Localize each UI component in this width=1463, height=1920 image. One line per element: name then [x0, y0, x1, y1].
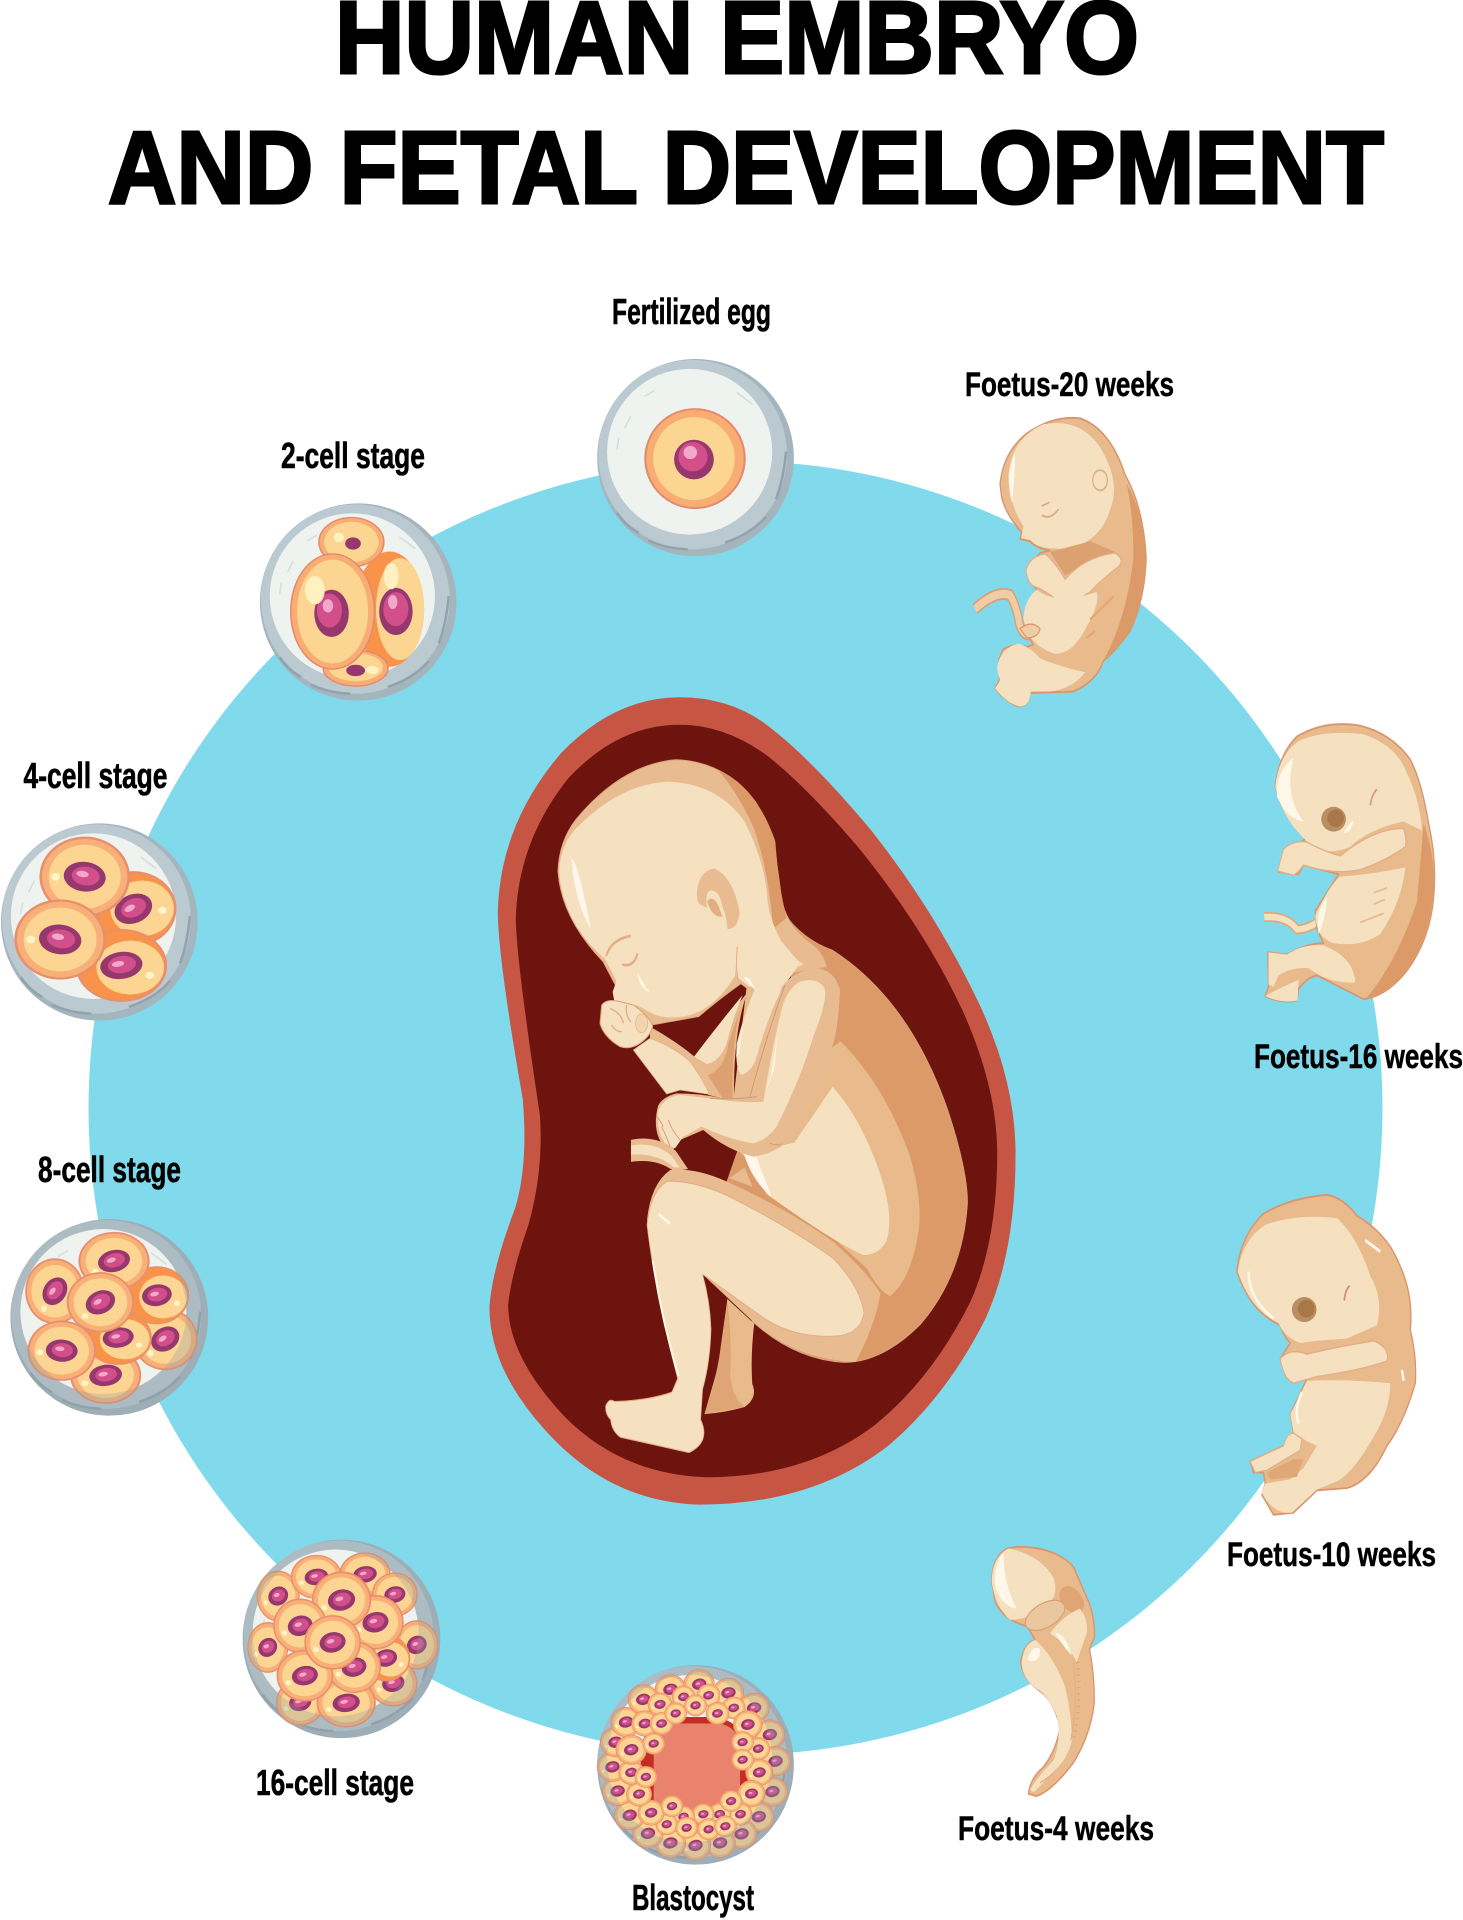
foetus 16 weeks	[1264, 724, 1435, 1001]
umbilical cord 20 weeks	[975, 594, 1038, 635]
head shadow	[718, 770, 787, 929]
foetus 4 weeks	[992, 1547, 1094, 1796]
leg highlights	[653, 1214, 678, 1376]
cheek highlight	[637, 973, 650, 993]
blue background circle	[88, 461, 1382, 1755]
label: Blastocyst: Blastocyst	[632, 1877, 754, 1918]
thigh outer	[647, 1170, 880, 1362]
central illustration: womb with fetus	[489, 697, 1016, 1505]
far arm	[650, 1027, 723, 1098]
torso light	[745, 1087, 889, 1255]
blastocyst	[597, 1665, 794, 1865]
near arm light	[657, 980, 825, 1148]
torso back	[718, 912, 967, 1362]
small top cell	[319, 518, 384, 567]
womb cavity	[508, 725, 997, 1477]
torso mid tone	[741, 1041, 920, 1296]
tan base behind chest	[733, 987, 783, 1100]
label: Fertilized egg: Fertilized egg	[612, 291, 771, 332]
egg stages top-left group	[1, 359, 794, 1021]
foetus group upper right	[975, 418, 1435, 1001]
label: Foetus-20 weeks: Foetus-20 weeks	[965, 366, 1174, 404]
ear	[697, 868, 740, 929]
neck highlight	[743, 977, 756, 991]
right cell	[355, 552, 424, 667]
fetus arms and chest	[600, 930, 840, 1157]
eye and brow	[606, 936, 637, 965]
head outer	[558, 760, 827, 1025]
label: 8-cell stage: 8-cell stage	[38, 1149, 181, 1190]
tan wedge under chin	[694, 993, 747, 1098]
near hand fingers	[657, 1117, 680, 1147]
label: 2-cell stage: 2-cell stage	[281, 435, 425, 476]
4-cell stage	[1, 823, 198, 1021]
label: 16-cell stage: 16-cell stage	[256, 1762, 414, 1803]
womb wall	[489, 697, 1016, 1505]
chest and neck	[736, 930, 800, 1075]
far hand	[600, 1001, 653, 1048]
fertilized egg	[597, 359, 794, 556]
egg stages bottom-left group	[10, 1219, 794, 1865]
chest highlight	[736, 1020, 744, 1057]
near arm highlight	[765, 1033, 778, 1093]
title: AND FETAL DEVELOPMENT	[108, 110, 1384, 225]
big left cell	[291, 554, 374, 669]
cavity	[641, 1717, 748, 1833]
small bottom cell	[323, 650, 388, 686]
belly highlight	[744, 1154, 771, 1196]
umbilical cord	[631, 1139, 688, 1171]
2-cell stage	[260, 503, 457, 701]
near arm outer	[656, 968, 840, 1157]
label: 4-cell stage: 4-cell stage	[24, 755, 168, 796]
leg and foot	[606, 1181, 864, 1453]
foetus 20 weeks	[975, 418, 1146, 707]
pelvis fold	[729, 1167, 752, 1187]
label: Foetus-4 weeks: Foetus-4 weeks	[958, 1810, 1154, 1848]
umbilical cord 16 weeks	[1264, 917, 1317, 929]
far leg and foot	[704, 1299, 754, 1414]
title	[108, 0, 1384, 225]
16-cell stage	[243, 1540, 440, 1738]
head light	[559, 782, 804, 1017]
foetus 10 weeks	[1237, 1195, 1416, 1515]
8-cell stage	[10, 1219, 208, 1416]
foetus group lower right	[992, 1195, 1416, 1796]
outer cell ring	[597, 1670, 791, 1860]
forehead highlight	[572, 859, 591, 929]
fetus lower body	[558, 760, 967, 1453]
inner cell ring	[616, 1684, 773, 1840]
far shoulder	[694, 995, 743, 1064]
